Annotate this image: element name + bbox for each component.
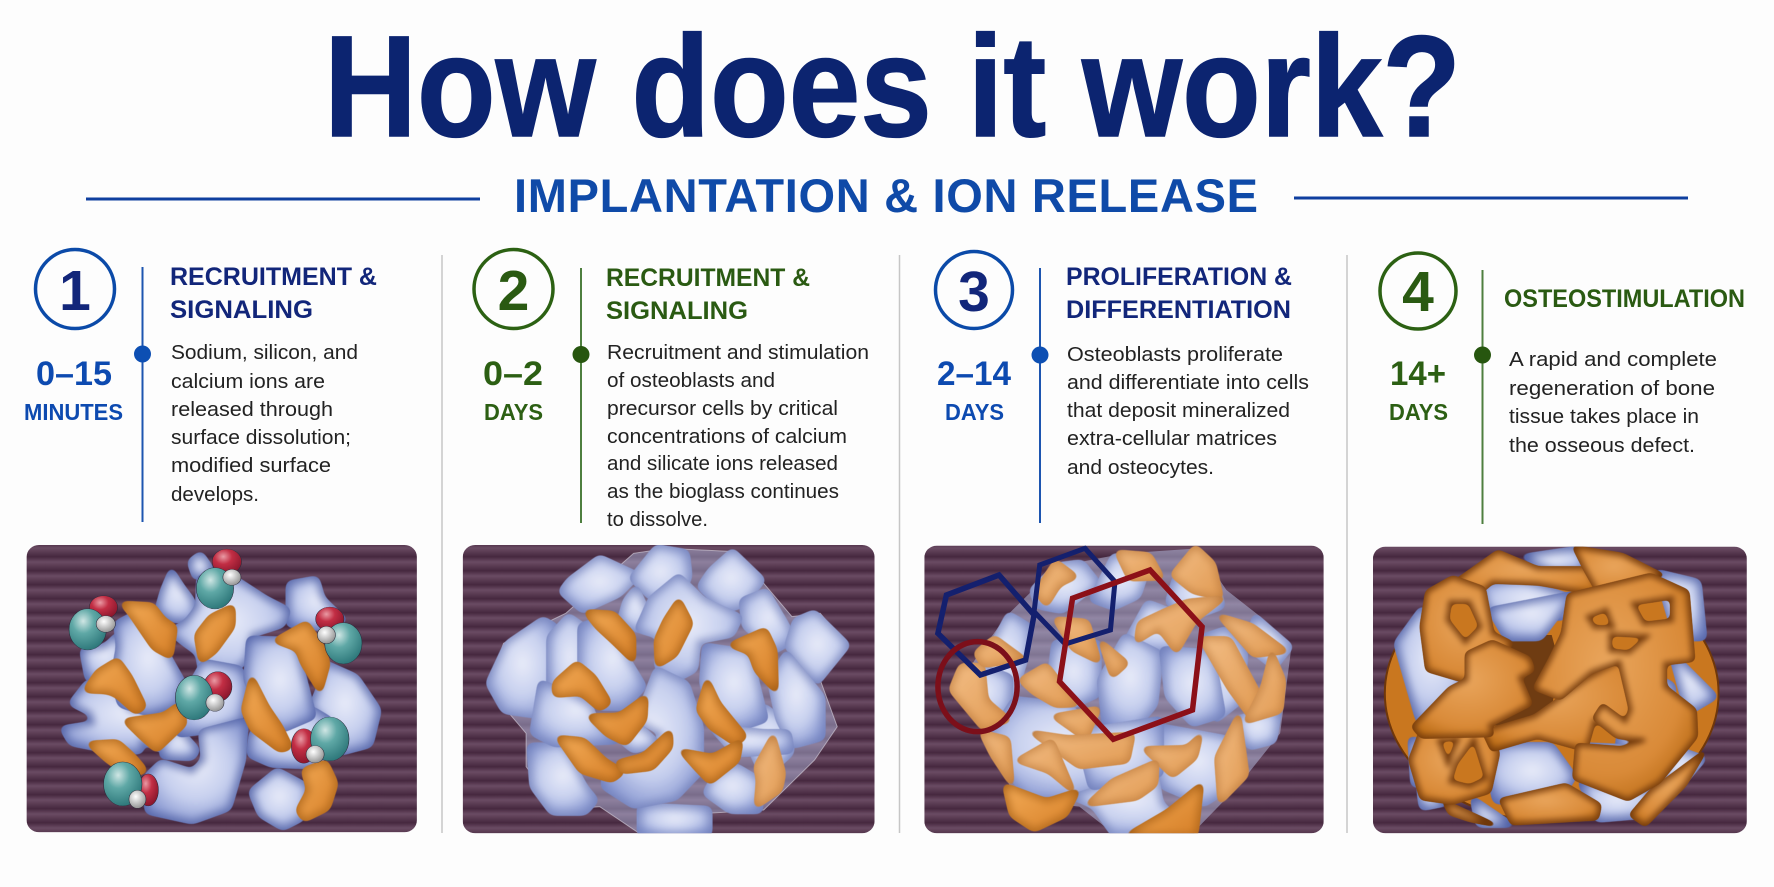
step 1 heading: RECRUITMENT & (170, 263, 377, 291)
step 1 column (24, 250, 377, 522)
step 3 heading (1066, 263, 1292, 324)
panel: step 3 illustration, proliferating cells with hexagons (924, 546, 1324, 835)
step 3 description: that deposit mineralized (1067, 400, 1290, 422)
step 4 description: tissue takes place in (1509, 406, 1699, 428)
step 3 number badge (936, 252, 1012, 328)
panel: step 1 illustration, ions and cells (27, 545, 417, 832)
step 2 heading (606, 264, 810, 325)
step 1 description: develops. (171, 484, 259, 506)
step 1 timeline marker (134, 267, 151, 522)
step 2 column (474, 250, 869, 531)
step 1 description: calcium ions are (171, 371, 325, 393)
step 1 heading: SIGNALING (170, 296, 313, 324)
orange bone network (1410, 547, 1704, 825)
step 4 description: A rapid and complete (1509, 349, 1717, 371)
step 2 description: as the bioglass continues (607, 481, 839, 503)
step 2 heading: SIGNALING (606, 297, 748, 325)
step 4 timeframe: DAYS (1389, 399, 1448, 425)
step 1 description (171, 342, 358, 506)
lavender cells (1396, 548, 1716, 825)
translucent hull (961, 548, 1291, 833)
orange osteoblasts (85, 603, 336, 820)
step 3 number badge: 3 (958, 260, 990, 324)
step 1 timeframe: 0–15 (36, 355, 112, 393)
step 4 number badge: 4 (1402, 260, 1434, 324)
red ellipse (938, 642, 1017, 732)
step 2 number badge: 2 (498, 259, 529, 323)
step 2 timeline marker (572, 268, 590, 523)
step 2 timeframe: DAYS (484, 399, 543, 425)
lavender cells (958, 555, 1291, 835)
orange cell layer (950, 546, 1288, 835)
step 2 description: precursor cells by critical (607, 398, 838, 420)
step 4 description (1509, 349, 1717, 457)
step 1 description: Sodium, silicon, and (171, 342, 358, 364)
step 3 timeframe: DAYS (945, 399, 1004, 425)
navy hexagon right (1034, 548, 1115, 644)
step 4 heading: OSTEOSTIMULATION (1504, 285, 1745, 313)
subtitle with side rules: IMPLANTATION & ION RELEASE (514, 169, 1258, 222)
step 3 timeline marker (1032, 268, 1048, 523)
step 2 description: concentrations of calcium (607, 426, 847, 448)
step 4 description: the osseous defect. (1509, 435, 1695, 457)
navy hexagon left (938, 575, 1034, 675)
step 3 column (936, 252, 1309, 523)
step 2 description: Recruitment and stimulation (607, 342, 869, 364)
step 1 heading (170, 263, 377, 324)
step 2 timeframe (483, 355, 543, 425)
step 4 timeframe (1389, 355, 1448, 425)
ion molecules (69, 549, 362, 808)
step 4 description: regeneration of bone (1509, 378, 1715, 400)
step 4 timeline marker (1474, 270, 1491, 524)
lavender cells (62, 553, 379, 828)
step 3 description: and osteocytes. (1067, 457, 1214, 479)
translucent hull (491, 548, 846, 833)
step 4 timeframe: 14+ (1390, 355, 1446, 393)
step 3 description: extra-cellular matrices (1067, 428, 1277, 450)
step 1 number badge: 1 (59, 259, 91, 323)
step 3 timeframe: 2–14 (937, 355, 1011, 393)
step 2 description: to dissolve. (607, 509, 708, 531)
step 2 description: and silicate ions released (607, 453, 838, 475)
step 2 number badge (474, 250, 553, 328)
step 2 heading: RECRUITMENT & (606, 264, 810, 292)
panel: step 4 illustration, regenerated bone network (1373, 547, 1747, 833)
red hexagon (1060, 570, 1202, 739)
step 1 timeframe (24, 355, 123, 425)
step 3 heading: PROLIFERATION & (1066, 263, 1292, 291)
step 1 description: modified surface (171, 455, 331, 477)
step 1 description: released through (171, 399, 333, 421)
lavender cells (488, 547, 849, 835)
panel: step 2 illustration, clustered cells (463, 545, 875, 835)
step 3 timeframe (937, 355, 1011, 425)
orange osteoblasts (554, 599, 784, 807)
step 2 description: of osteoblasts and (607, 370, 775, 392)
step 1 number badge (36, 250, 114, 328)
step 3 description: and differentiate into cells (1067, 372, 1309, 394)
step 4 column (1380, 253, 1745, 524)
step 2 timeframe: 0–2 (483, 355, 543, 393)
step 1 description: surface dissolution; (171, 427, 351, 449)
step 1 timeframe: MINUTES (24, 399, 123, 425)
step 4 number badge (1380, 253, 1456, 329)
step 2 description (607, 342, 869, 531)
step 3 description: Osteoblasts proliferate (1067, 344, 1283, 366)
step 3 heading: DIFFERENTIATION (1066, 296, 1291, 324)
outer orange rim (1385, 565, 1719, 822)
column dividers (442, 255, 1347, 833)
step 3 description (1067, 344, 1309, 479)
dark interior (1494, 635, 1554, 726)
title: How does it work? (324, 6, 1461, 167)
